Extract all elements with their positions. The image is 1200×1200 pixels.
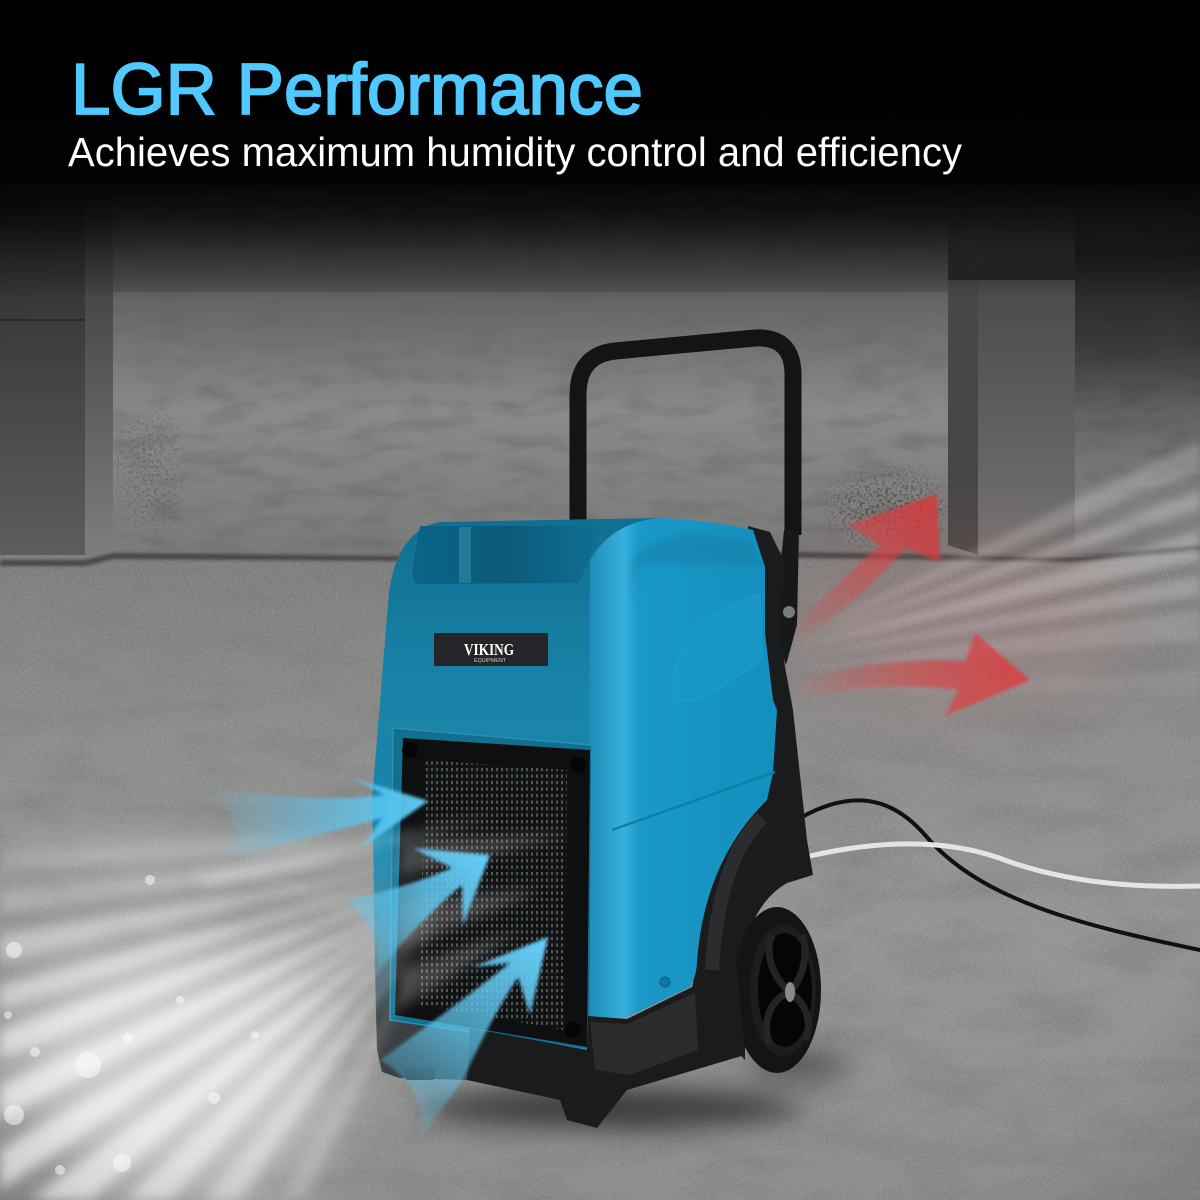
badge text: VIKING [464,640,514,659]
dehumidifier shadow [420,1088,800,1128]
texture: floor speckle [0,555,1200,1200]
floor mist band [0,820,340,880]
light rays: intake [0,815,500,1200]
grille [395,738,590,1047]
light rays over grille [400,835,570,1010]
blue body side [587,518,777,1018]
handle lower arm [778,530,799,665]
panel ridge [612,772,775,830]
side bolt [783,606,795,618]
arrow: blue intake bottom [380,937,548,1140]
light rays: exhaust [790,440,1200,695]
grille frame [390,728,592,1050]
curved panel [674,595,762,700]
wheel shadow [750,1051,850,1079]
handle [578,338,793,535]
texture: wall weathering [0,190,1200,560]
subtitle: Achieves maximum humidity control and efficiency [68,129,962,175]
arrow: red exhaust upper [795,494,940,645]
lower-left translucent body [372,860,470,1080]
wheel arch highlight [712,818,762,970]
dehumidifier [372,338,821,1128]
wall right shaded section [1075,190,1200,500]
blue body front [372,518,660,1080]
arrow: blue intake top [205,777,428,860]
header dark gradient [0,0,1200,300]
rear black frame [690,526,813,1060]
background: concrete wall [0,150,1200,570]
badge text [464,640,514,664]
badge [434,633,548,666]
wall to floor edge [0,545,1200,566]
background: concrete floor [0,555,1200,1200]
side upper shading [632,534,762,615]
black base [467,965,745,1128]
screw on side [660,977,670,987]
grille screws [402,742,586,1038]
pillar: right [948,190,1075,557]
base highlight [590,993,698,1075]
badge text: EQUIPMENT [474,658,506,664]
rear wheel [733,907,821,1073]
recess highlight [459,527,471,583]
title: LGR Performance [71,50,643,130]
top recess [412,526,598,584]
wall splatter [113,410,948,552]
lower left foot [405,1068,435,1080]
grille dots [420,760,567,1030]
water droplets [4,875,259,1175]
exhaust pink haze [790,530,1130,710]
floor mist [0,940,340,1200]
pillar: left [0,190,113,562]
power cords [800,800,1200,950]
wall upper band [113,200,948,292]
arrow: red exhaust lower [795,633,1030,716]
arrow: blue intake middle [345,848,490,975]
texture: floor stains [0,555,1200,1200]
